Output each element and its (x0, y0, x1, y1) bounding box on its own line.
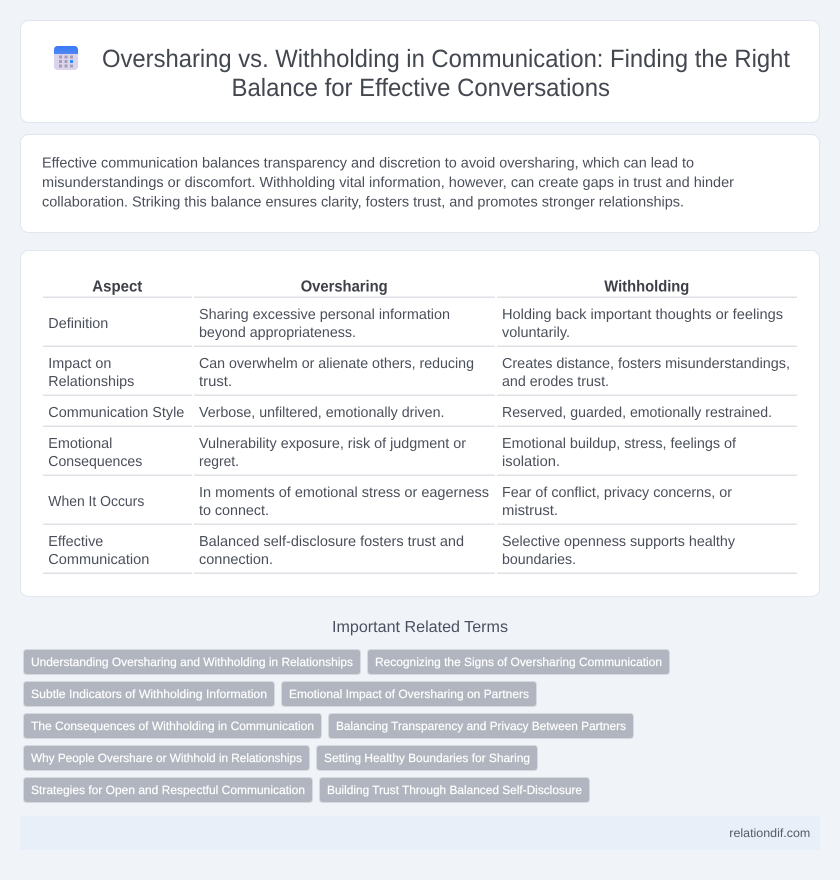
table header: Withholding (604, 278, 689, 296)
tag (24, 714, 322, 738)
table header: Aspect (92, 278, 143, 296)
row: definition: beyond appropriateness. (199, 325, 356, 341)
tag: The Consequences of Withholding in Communication (31, 719, 314, 733)
tag (368, 650, 670, 674)
tag: Why People Overshare or Withhold in Relationships (31, 751, 302, 765)
panel: comparison table (20, 250, 820, 596)
footer: relationdif.com (729, 826, 810, 840)
intro paragraph: misunderstandings or discomfort. Withholding vital information, however, can create gaps in trust and hinder (42, 175, 734, 191)
row: definition: voluntarily. (502, 325, 570, 341)
tag: Understanding Oversharing and Withholding in Relationships (31, 655, 353, 669)
tag: Recognizing the Signs of Oversharing Communication (375, 655, 662, 669)
intro paragraph: Effective communication balances transparency and discretion to avoid oversharing, which can lead to (42, 156, 694, 172)
table header (92, 278, 689, 296)
row: emotional consequences: Vulnerability exposure, risk of judgment or (199, 436, 466, 452)
tag: Building Trust Through Balanced Self-Disclosure (327, 783, 582, 797)
intro paragraph (42, 156, 734, 210)
tag: Subtle Indicators of Withholding Information (31, 687, 267, 701)
row: impact on relationships: Relationships (48, 374, 134, 390)
footer (20, 816, 820, 850)
tag: Setting Healthy Boundaries for Sharing (324, 751, 530, 765)
row: impact on relationships: Impact on (48, 356, 111, 372)
row: emotional consequences: Emotional (48, 436, 112, 452)
row: impact on relationships: Creates distance, fosters misunderstandings, (502, 356, 790, 372)
tag (24, 778, 312, 802)
row: effective communication: Communication (48, 552, 149, 568)
row: emotional consequences: Consequences (48, 454, 142, 470)
row: emotional consequences: isolation. (502, 454, 560, 470)
row: emotional consequences: regret. (199, 454, 239, 470)
title: Balance for Effective Conversations (232, 74, 610, 102)
row: effective communication: boundaries. (502, 552, 576, 568)
panel: introduction (20, 134, 820, 232)
row: impact on relationships: and erodes trust. (502, 374, 609, 390)
row: definition: Holding back important thoughts or feelings (502, 307, 783, 323)
panel: title card (20, 20, 820, 122)
tag: Emotional Impact of Oversharing on Partners (289, 687, 529, 701)
row: communication style: Communication Style (48, 405, 184, 421)
tag (24, 650, 360, 674)
tag: Strategies for Open and Respectful Communication (31, 783, 305, 797)
row: when it occurs: Fear of conflict, privacy concerns, or (502, 485, 732, 501)
row: emotional consequences (48, 436, 737, 470)
tag (24, 682, 274, 706)
row: communication style: Reserved, guarded, emotionally restrained. (502, 405, 772, 421)
row: effective communication: Balanced self-disclosure fosters trust and (199, 534, 464, 550)
row: definition (48, 307, 783, 341)
tag (328, 714, 634, 738)
tag (316, 746, 538, 770)
intro paragraph: collaboration. Striking this balance ensures clarity, fosters trust, and promotes stronger relationships. (42, 194, 684, 210)
row: impact on relationships: trust. (199, 374, 232, 390)
row: when it occurs (48, 485, 732, 519)
row: definition: Definition (48, 316, 108, 332)
tag: Balancing Transparency and Privacy Between Partners (336, 719, 626, 733)
tag (282, 682, 536, 706)
row: definition: Sharing excessive personal information (199, 307, 450, 323)
heading: important related terms: Important Related Terms (332, 619, 508, 636)
title (102, 45, 790, 102)
row: effective communication: connection. (199, 552, 273, 568)
row: when it occurs: mistrust. (502, 503, 558, 519)
row: effective communication: Effective (48, 534, 103, 550)
row: when it occurs: When It Occurs (48, 494, 144, 510)
table header: Oversharing (301, 278, 388, 296)
row: emotional consequences: Emotional buildup, stress, feelings of (502, 436, 737, 452)
tag (24, 746, 310, 770)
tag (320, 778, 590, 802)
row: effective communication: Selective openness supports healthy (502, 534, 736, 550)
related term tags (24, 650, 670, 802)
row: when it occurs: to connect. (199, 503, 269, 519)
title: Oversharing vs. Withholding in Communication: Finding the Right (102, 45, 790, 73)
row: communication style: Verbose, unfiltered, emotionally driven. (199, 405, 444, 421)
icon: calendar (54, 46, 78, 70)
row: impact on relationships: Can overwhelm or alienate others, reducing (199, 356, 474, 372)
row: impact on relationships (48, 356, 790, 390)
row: effective communication (48, 534, 736, 568)
row: when it occurs: In moments of emotional stress or eagerness (199, 485, 489, 501)
row: communication style (48, 405, 772, 421)
